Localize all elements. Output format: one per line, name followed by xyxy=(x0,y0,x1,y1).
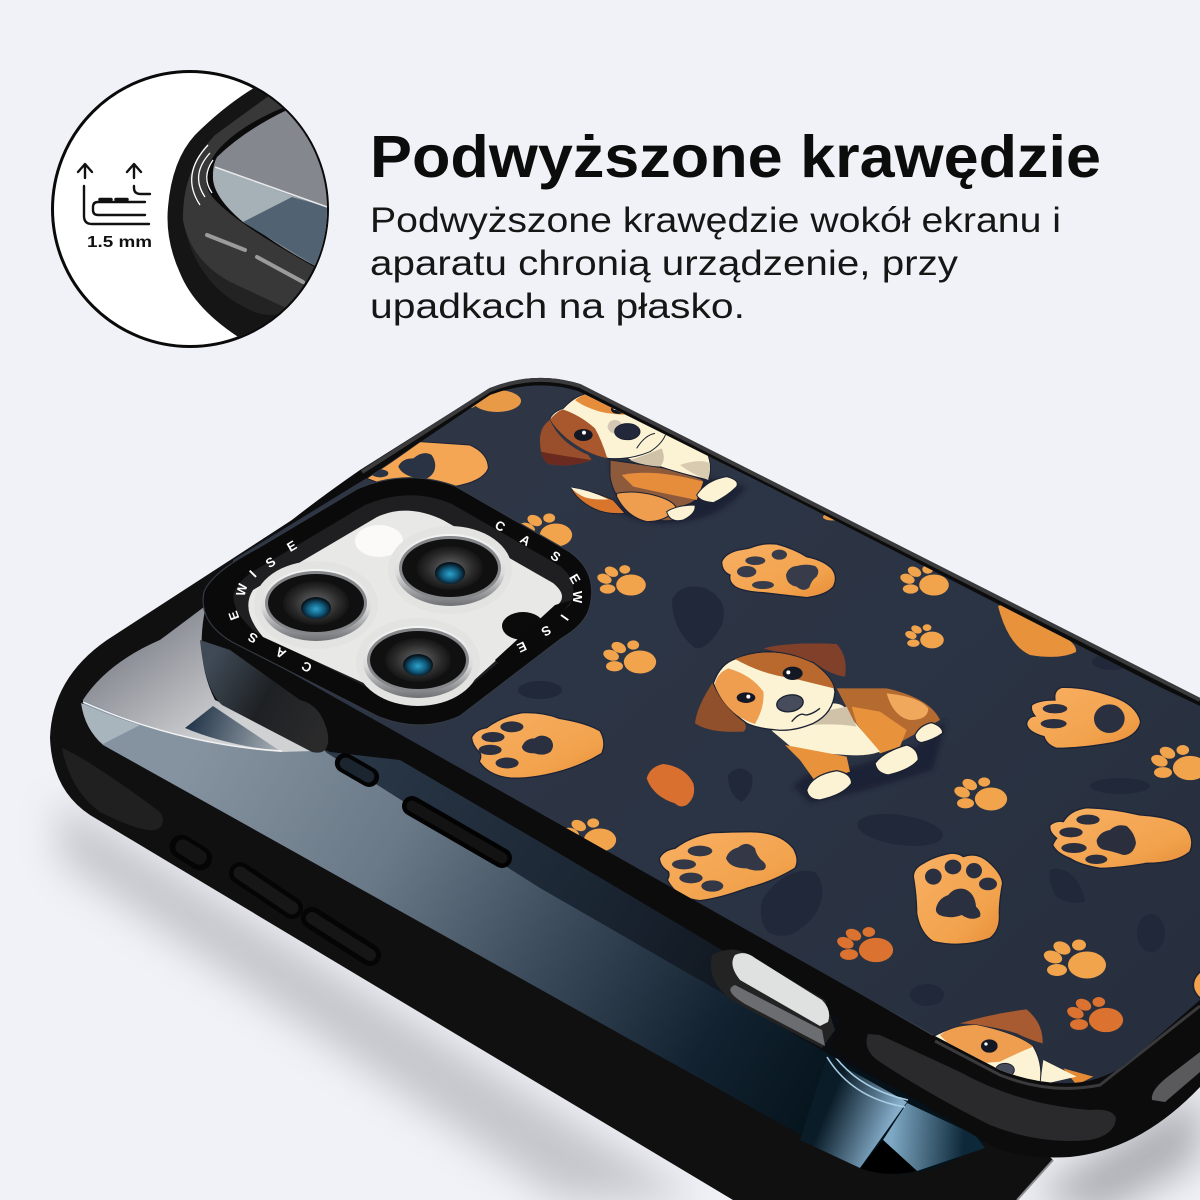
ring brand lettering: S xyxy=(245,629,260,647)
rear case frame xyxy=(50,468,1053,1200)
screen dark wedge xyxy=(185,706,280,751)
paw print right top xyxy=(1027,687,1141,748)
case black body xyxy=(202,378,1200,1158)
ring brand lettering: I xyxy=(246,567,259,580)
corner bumper near camera xyxy=(200,640,328,753)
lower rim edge line xyxy=(380,716,933,1035)
camera plate xyxy=(248,511,562,700)
paw print lower center xyxy=(659,832,797,901)
case top rim highlight xyxy=(362,380,1200,700)
close-up translucent wall xyxy=(183,96,327,308)
lens left xyxy=(254,561,378,649)
screen reflection upper xyxy=(83,580,345,752)
island outer shell xyxy=(203,478,592,725)
icon label: 1.5 mm xyxy=(87,234,152,251)
puppy top xyxy=(540,393,747,524)
microphone oval xyxy=(331,749,383,791)
ring brand lettering: W xyxy=(570,591,585,604)
ring brand lettering: C xyxy=(298,658,315,676)
front phone case xyxy=(200,378,1200,1158)
rim highlight xyxy=(935,1006,1200,1088)
description text xyxy=(370,200,1061,326)
lower ring over sensor xyxy=(495,600,572,670)
ring brand lettering xyxy=(225,517,585,676)
corner bumper bottom right xyxy=(866,1034,1116,1141)
rear case power button xyxy=(165,830,217,875)
paw print upper center xyxy=(722,544,835,598)
phone shadow xyxy=(60,800,1200,1200)
puppy center xyxy=(695,643,947,803)
paw print right edge xyxy=(1192,971,1200,999)
close-up case corner xyxy=(168,88,284,337)
rear phone with screen xyxy=(50,468,1053,1200)
dog and paw pattern on the case xyxy=(367,390,1200,1085)
dark spots xyxy=(518,586,1165,1006)
case side band xyxy=(205,640,1100,1150)
puppy bottom xyxy=(933,1009,1093,1085)
ring brand lettering: A xyxy=(272,644,289,662)
blue fan wallpaper xyxy=(800,1057,985,1174)
orange drop and oval xyxy=(464,390,1076,806)
ring brand lettering: E xyxy=(566,571,584,587)
ring brand lettering: E xyxy=(225,609,242,622)
lens top xyxy=(388,526,512,614)
rear flash xyxy=(355,525,403,557)
ring brand lettering: W xyxy=(233,581,251,598)
screen curve highlight xyxy=(83,702,282,751)
close-up screen xyxy=(212,110,327,266)
speaker grille xyxy=(1152,1052,1200,1102)
back panel xyxy=(233,385,1200,1083)
ring brand lettering: E xyxy=(515,638,529,656)
description text: upadkach na płasko. xyxy=(370,286,745,326)
sensor hole xyxy=(502,612,544,640)
ring brand lettering: C xyxy=(492,517,508,535)
rear case left corner bumper xyxy=(62,748,163,830)
lens bottom xyxy=(356,618,480,706)
paw print upper left xyxy=(367,442,488,488)
island bevel xyxy=(233,495,573,703)
icon: raised lip 1.5 mm diagram xyxy=(78,164,150,224)
title: Podwyższone krawędzie xyxy=(370,124,1101,190)
ring brand lettering: E xyxy=(284,537,300,555)
ring brand lettering: S xyxy=(548,548,564,565)
paw print right middle xyxy=(1050,808,1192,868)
charging port xyxy=(711,949,835,1048)
inset circle: raised edge close-up xyxy=(52,60,340,346)
close-up edge highlight xyxy=(207,235,303,282)
screen light wedge xyxy=(81,703,140,744)
rear screen xyxy=(83,478,1050,1174)
description text: aparatu chronią urządzenie, przy xyxy=(370,243,958,283)
description text: Podwyższone krawędzie wokół ekranu i xyxy=(370,200,1061,240)
front long button xyxy=(412,806,502,858)
close-up curved motion lines xyxy=(192,145,213,205)
rear case edge highlight xyxy=(1017,1160,1053,1200)
paw print lower left xyxy=(472,713,604,778)
camera island xyxy=(203,478,592,725)
small paw prints xyxy=(518,513,1200,978)
close-up inner rim xyxy=(206,108,314,266)
paw print vertical xyxy=(913,853,1003,944)
ring brand lettering: S xyxy=(263,553,279,571)
rear case volume buttons xyxy=(240,873,370,955)
ring brand lettering: I xyxy=(558,612,572,623)
ring brand lettering: S xyxy=(538,622,554,640)
ring brand lettering: A xyxy=(517,531,534,549)
